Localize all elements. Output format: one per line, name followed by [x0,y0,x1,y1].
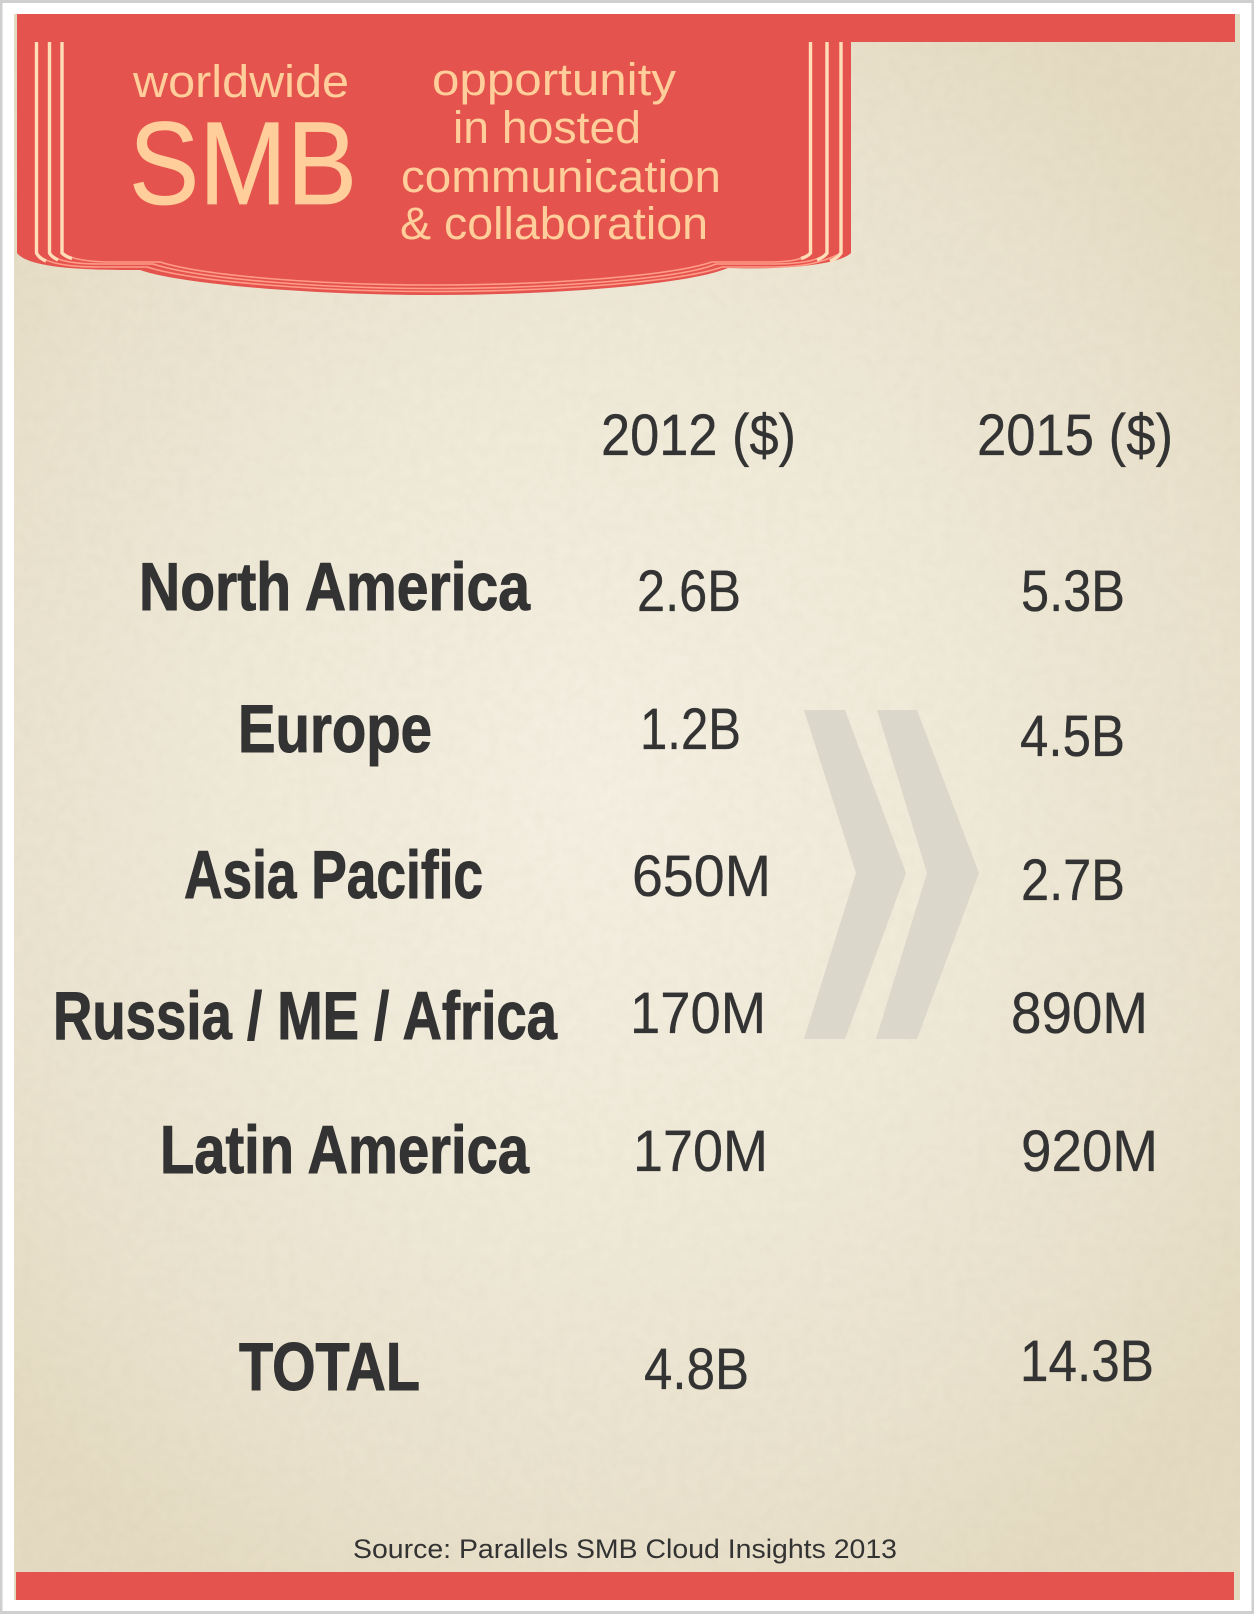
icon: double chevron arrow [804,710,979,1039]
row: Latin America: 170M [633,1119,768,1184]
column header: 2012: 2012 ($) [601,403,796,468]
bottom red bar [16,1572,1234,1600]
banner text: communication: communication [401,151,721,202]
row: Russia / ME / Africa: 170M [630,981,766,1046]
top red bar [17,14,1235,42]
row: North America: 2.6B [637,559,741,624]
row: Latin America: 920M [1021,1119,1158,1184]
row: TOTAL: 4.8B [644,1337,749,1402]
banner text: in hosted: in hosted [453,102,641,153]
row: Asia Pacific: 650M [632,844,771,909]
row: Asia Pacific [184,837,1125,913]
banner decorative lines [36,42,841,292]
column header: 2015: 2015 ($) [977,403,1173,468]
banner text: SMB: SMB [129,98,357,230]
banner text: opportunity: opportunity [432,54,677,105]
banner text: & collaboration: & collaboration [400,198,708,249]
row: North America: 5.3B [1021,559,1125,624]
row: Asia Pacific: 2.7B [1021,848,1125,913]
row: Europe: 4.5B [1020,704,1125,769]
row: North America: North America [139,549,531,625]
row: Europe: Europe [238,691,432,767]
row: Asia Pacific: Asia Pacific [184,837,483,913]
row: Russia / ME / Africa: 890M [1011,981,1148,1046]
banner: title ribbon [17,14,851,295]
banner shape [17,14,851,295]
row: TOTAL: 14.3B [1020,1329,1154,1394]
row: TOTAL [239,1329,1154,1405]
banner text: worldwide: worldwide [132,56,349,107]
row: Europe: 1.2B [640,697,741,762]
row: Europe [238,691,1125,769]
row: TOTAL: TOTAL [239,1329,420,1405]
row: Russia / ME / Africa [53,978,1148,1054]
row: North America [139,549,1125,625]
row: Latin America [160,1112,1158,1188]
row: Latin America: Latin America [160,1112,530,1188]
row: Russia / ME / Africa: Russia / ME / Africa [53,978,558,1054]
source note: Source: Parallels SMB Cloud Insights 2013 [353,1534,897,1564]
